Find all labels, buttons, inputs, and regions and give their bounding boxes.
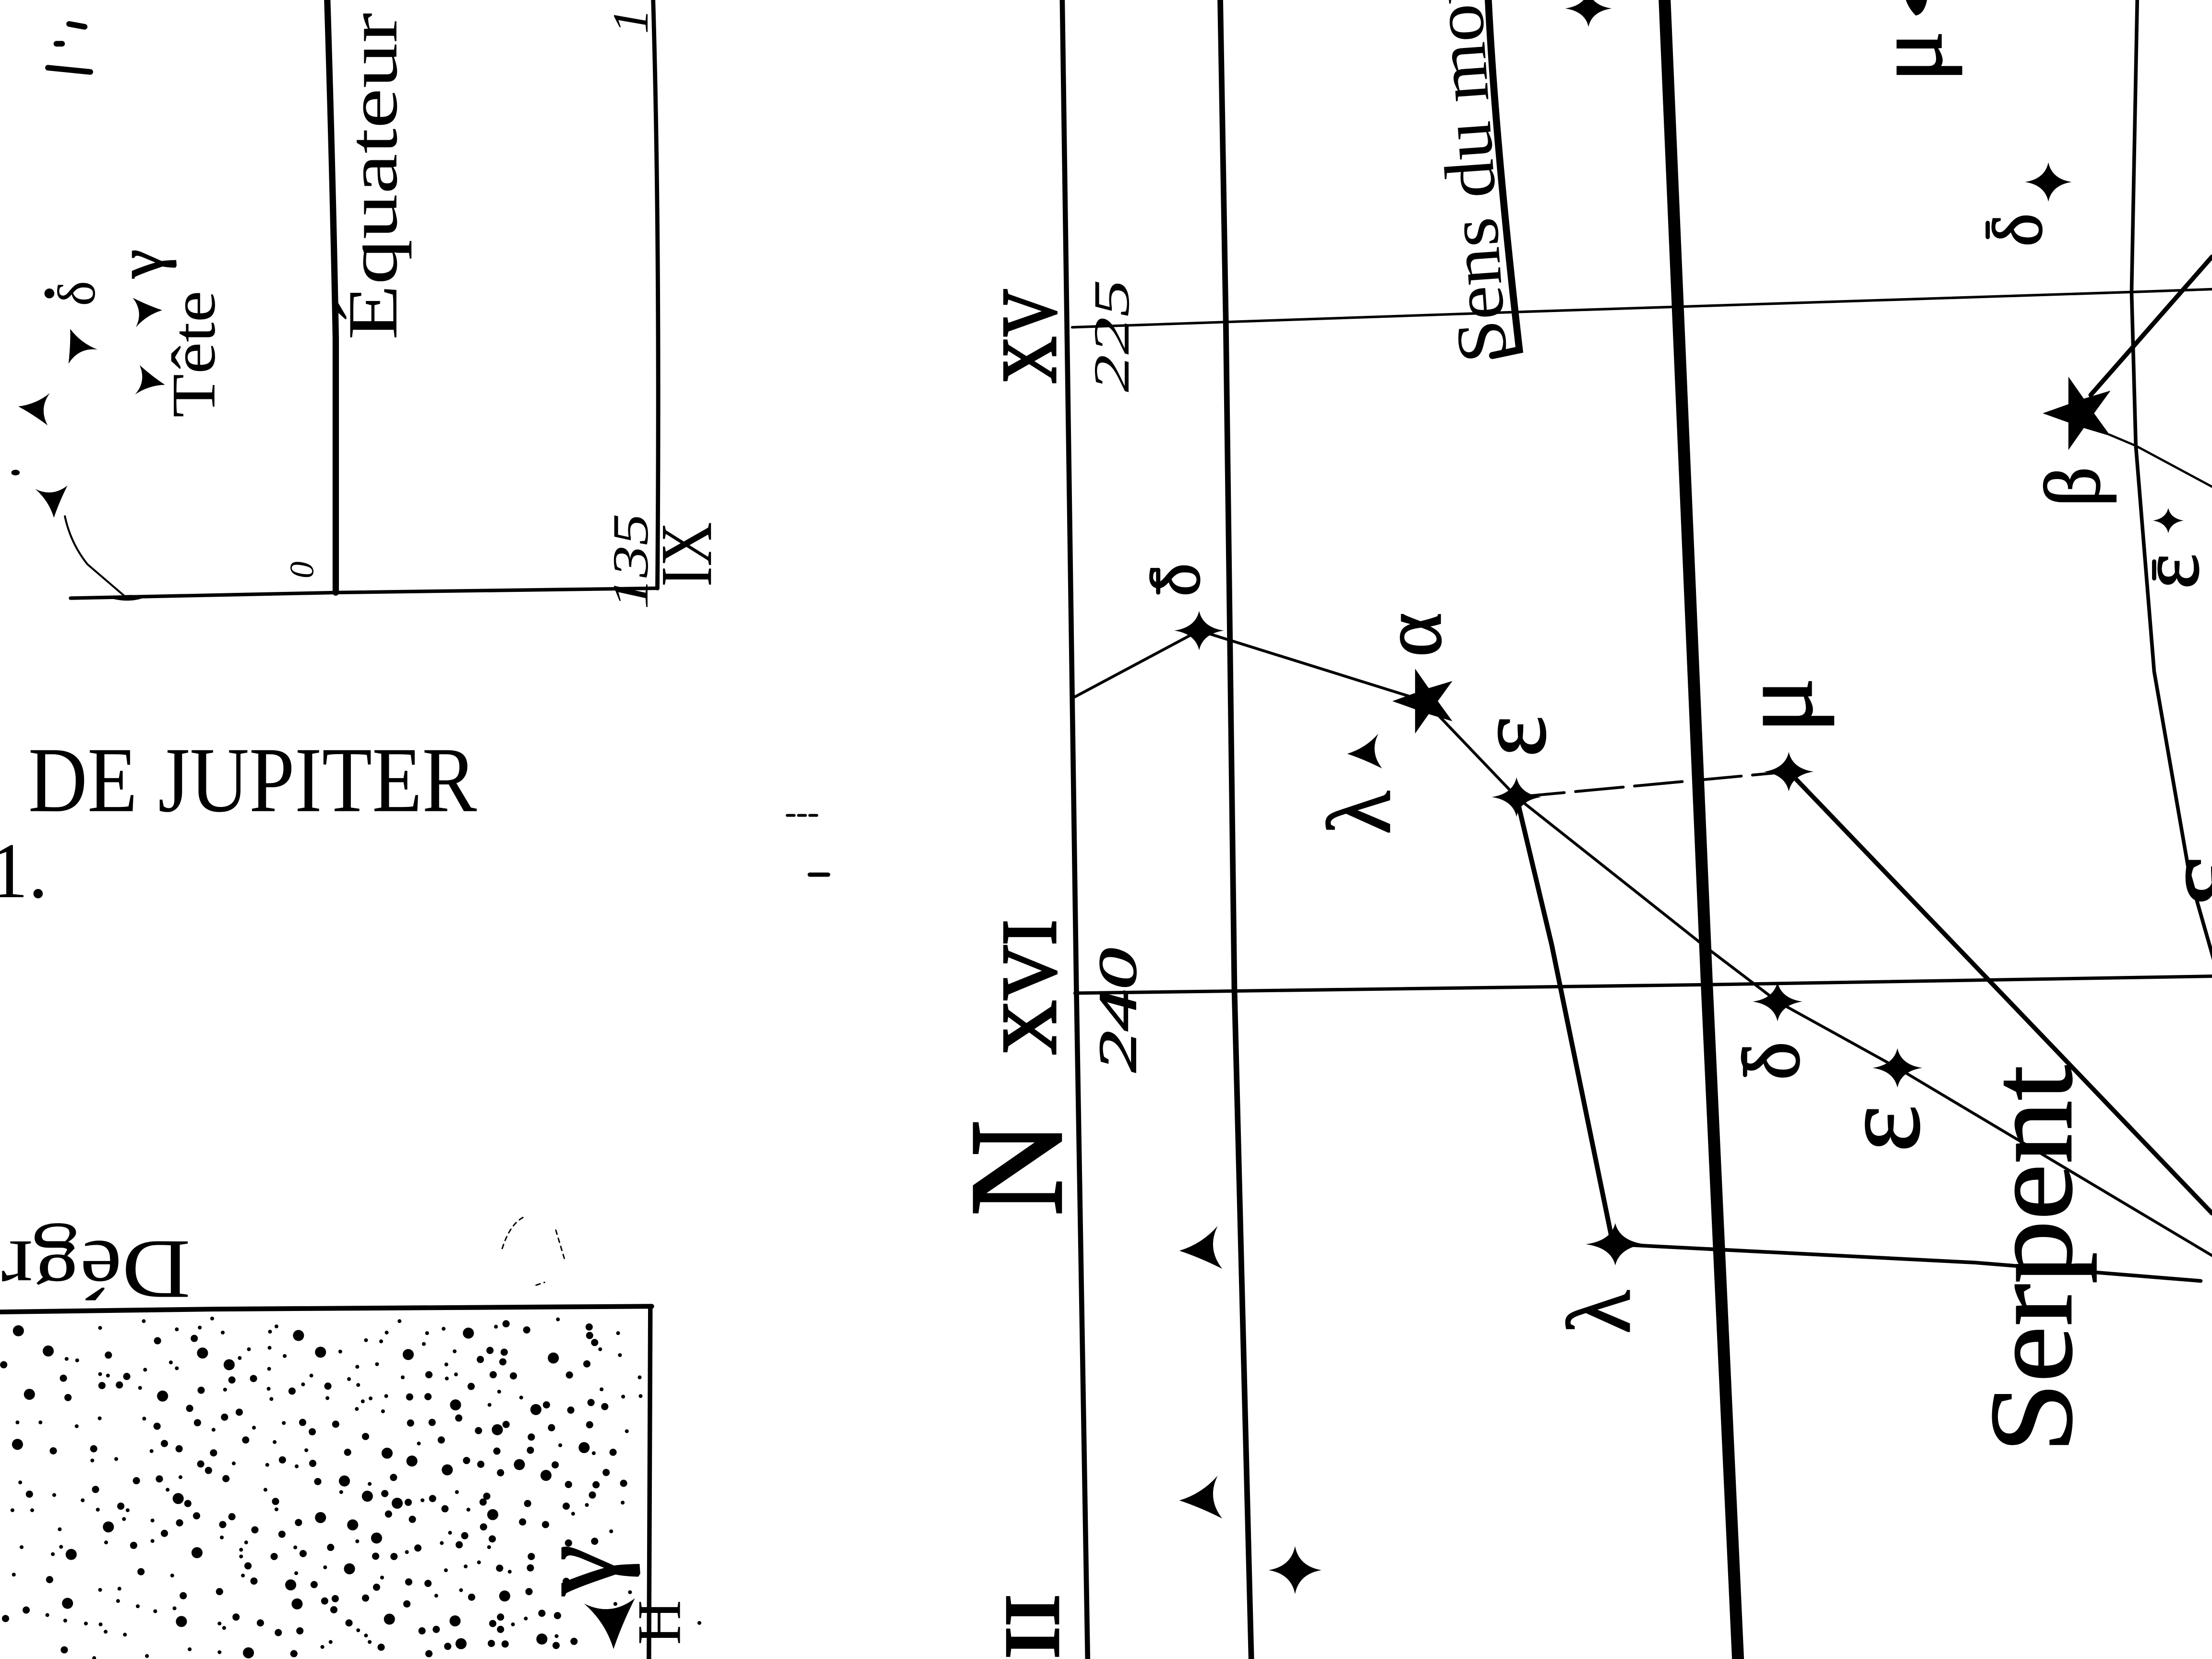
icon: triangular star in nebula box xyxy=(584,1598,635,1649)
label group: greek star names: α xyxy=(1365,613,1459,657)
label group: greek star names: δ xyxy=(1726,1042,1816,1080)
label: gamma and delta of head xyxy=(45,250,177,306)
label: IX: IX xyxy=(646,522,727,587)
label: Tete: Tête xyxy=(159,290,228,418)
label group: greek star names: δ xyxy=(1136,563,1214,596)
text: Serpent: Serpent xyxy=(1966,1065,2097,1453)
label group: greek star names: ε xyxy=(1818,1105,1943,1152)
panel: main chart grid lines xyxy=(1062,0,2212,1659)
mark: small dash xyxy=(810,874,828,876)
icon group: five-point stars xyxy=(1393,377,2111,733)
label: N: N xyxy=(943,1120,1090,1216)
panel: upper left grid xyxy=(12,0,727,610)
mark: small dashes xyxy=(787,815,819,816)
label: gamma and delta of head: γ xyxy=(105,250,177,278)
label: gamma in nebula box: γ xyxy=(512,1545,640,1596)
label group: greek star names: μ xyxy=(1719,677,1834,733)
title: DE JUPITER: DE JUPITER xyxy=(28,728,477,831)
mark: cropped blob at top xyxy=(1906,0,1927,15)
icon group: triangular stars xyxy=(1179,733,1382,1518)
label group: greek star names: ε xyxy=(1457,716,1566,757)
label: XVI: XVI xyxy=(986,920,1072,1055)
chart: stipple dots large xyxy=(4,1319,699,1658)
panel: stippled nebula box xyxy=(0,1306,699,1659)
label: cropped H: H xyxy=(625,1600,693,1645)
panel: constellation lines xyxy=(1072,257,2212,1281)
label group: greek star names: δ xyxy=(1978,213,2056,247)
label: XV: XV xyxy=(986,289,1072,384)
label: Equateur: Équateur xyxy=(334,12,412,340)
label: 135: 135 xyxy=(602,514,659,610)
label group: greek star names: λ xyxy=(1549,1290,1649,1334)
label group: greek star names: β xyxy=(2029,467,2116,507)
label: gamma and delta of head: δ xyxy=(47,281,107,306)
mark: faint ring xyxy=(502,1216,565,1285)
icon: head stars xyxy=(12,298,168,518)
label: zero degree: 0 xyxy=(283,562,321,578)
label group: greek star names xyxy=(1136,31,2212,1334)
label: cropped tick numeral: 1 xyxy=(602,9,659,34)
label group: greek star names: λ xyxy=(1309,791,1409,834)
label: 225: 225 xyxy=(1083,279,1140,392)
mark: broken lettering top left xyxy=(48,24,90,72)
arrow: motion underline xyxy=(1488,0,1519,356)
icon group: four-point stars xyxy=(1174,0,2184,1594)
label group: greek star names: μ xyxy=(1856,31,1962,82)
label: XVII cropped: II xyxy=(989,1594,1075,1659)
label: 240: 240 xyxy=(1088,948,1148,1072)
